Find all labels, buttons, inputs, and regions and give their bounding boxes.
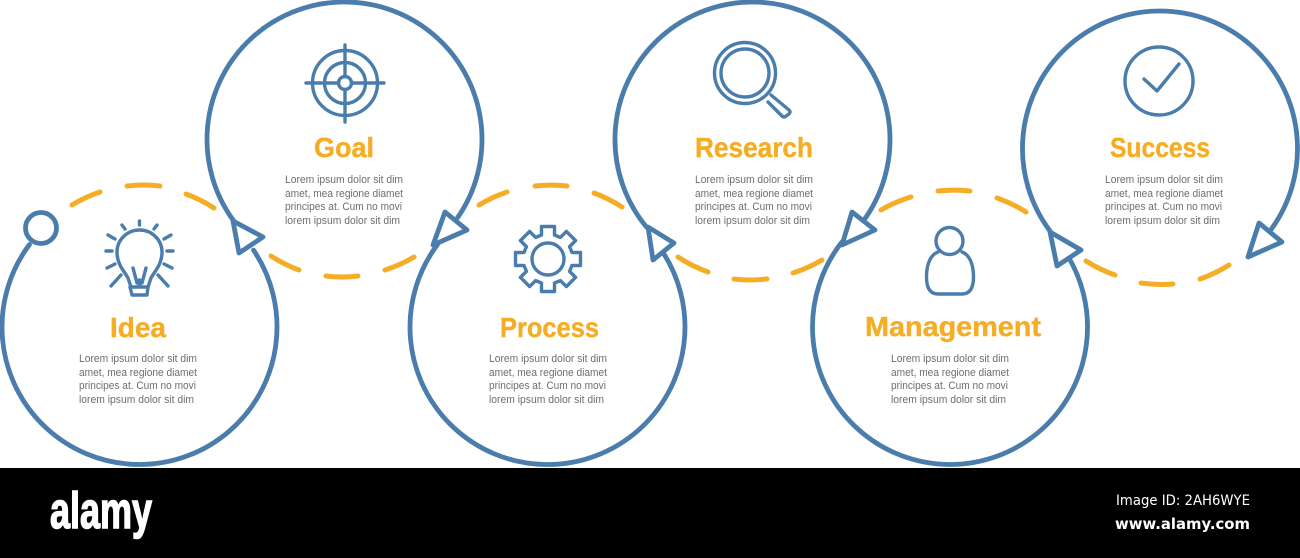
- text block: goal: amet, mea regione diamet: [285, 188, 403, 200]
- heading: success: Success: [1110, 132, 1210, 163]
- text block: management: amet, mea regione diamet: [891, 367, 1009, 379]
- icon: check mark in circle: [1125, 47, 1193, 115]
- text block: research: amet, mea regione diamet: [695, 188, 813, 200]
- text block: goal: Lorem ipsum dolor sit dim: [285, 174, 403, 186]
- footer logo: alamy: [50, 482, 152, 539]
- text block: goal: [285, 174, 403, 227]
- text block: process: principes at. Cum no movi: [489, 380, 606, 392]
- image id: Image ID: 2AH6WYE: [1116, 493, 1250, 509]
- text block: idea: principes at. Cum no movi: [79, 380, 196, 392]
- dashed connector: research to management: [678, 257, 822, 280]
- text block: success: [1105, 174, 1223, 227]
- panel: goal: [207, 2, 482, 245]
- process arrowhead: [648, 227, 674, 260]
- heading: management: Management: [865, 311, 1041, 342]
- text block: research: Lorem ipsum dolor sit dim: [695, 174, 813, 186]
- success ring: [1022, 11, 1297, 231]
- text block: goal: principes at. Cum no movi: [285, 201, 402, 213]
- process ring: [410, 244, 685, 465]
- text block: management: Lorem ipsum dolor sit dim: [891, 353, 1009, 365]
- dashed connector: idea to goal: [72, 185, 214, 208]
- text block: idea: amet, mea regione diamet: [79, 367, 197, 379]
- text block: research: [695, 174, 813, 227]
- text block: success: lorem ipsum dolor sit dim: [1105, 215, 1220, 227]
- research arrowhead: [842, 212, 875, 245]
- research ring: [615, 2, 890, 227]
- text block: idea: Lorem ipsum dolor sit dim: [79, 353, 197, 365]
- dashed connector: success tail: [1086, 261, 1229, 285]
- icon: light bulb: [106, 221, 173, 295]
- dashed connector: process to research: [479, 185, 622, 207]
- panel: idea: [2, 212, 277, 464]
- panel: management: [813, 228, 1088, 464]
- icon: magnifying glass: [714, 42, 790, 117]
- text block: success: principes at. Cum no movi: [1105, 201, 1222, 213]
- website: www.alamy.com: [1115, 515, 1250, 533]
- text block: success: Lorem ipsum dolor sit dim: [1105, 174, 1223, 186]
- text block: idea: [79, 353, 197, 406]
- panel: process: [410, 226, 685, 465]
- panel: success: [1022, 11, 1297, 257]
- start marker circle: [26, 212, 56, 244]
- text block: process: lorem ipsum dolor sit dim: [489, 394, 604, 406]
- heading: research: Research: [695, 132, 813, 163]
- text block: process: amet, mea regione diamet: [489, 367, 607, 379]
- heading: goal: Goal: [314, 132, 374, 163]
- dashed connector: management to success: [881, 190, 1026, 212]
- panel: research: [615, 2, 890, 245]
- idea ring: [2, 244, 277, 464]
- management ring: [813, 242, 1088, 464]
- dashed connector: goal to process: [271, 256, 414, 277]
- text block: management: lorem ipsum dolor sit dim: [891, 394, 1006, 406]
- text block: goal: lorem ipsum dolor sit dim: [285, 215, 400, 227]
- heading: process: Process: [500, 312, 599, 343]
- goal arrowhead: [433, 212, 467, 245]
- goal ring: [207, 2, 482, 221]
- text block: research: lorem ipsum dolor sit dim: [695, 215, 810, 227]
- text block: success: amet, mea regione diamet: [1105, 188, 1223, 200]
- management arrowhead: [1050, 232, 1081, 266]
- idea arrowhead: [233, 221, 263, 253]
- text block: process: Lorem ipsum dolor sit dim: [489, 353, 607, 365]
- text block: management: [891, 353, 1009, 406]
- success arrowhead: [1248, 223, 1282, 257]
- text block: process: [489, 353, 607, 406]
- icon: gear: [516, 226, 580, 292]
- text block: management: principes at. Cum no movi: [891, 380, 1008, 392]
- icon: target: [306, 45, 384, 122]
- text block: research: principes at. Cum no movi: [695, 201, 812, 213]
- heading: idea: Idea: [110, 312, 166, 343]
- footer bar: [0, 468, 1300, 558]
- icon: person: [926, 228, 974, 294]
- text block: idea: lorem ipsum dolor sit dim: [79, 394, 194, 406]
